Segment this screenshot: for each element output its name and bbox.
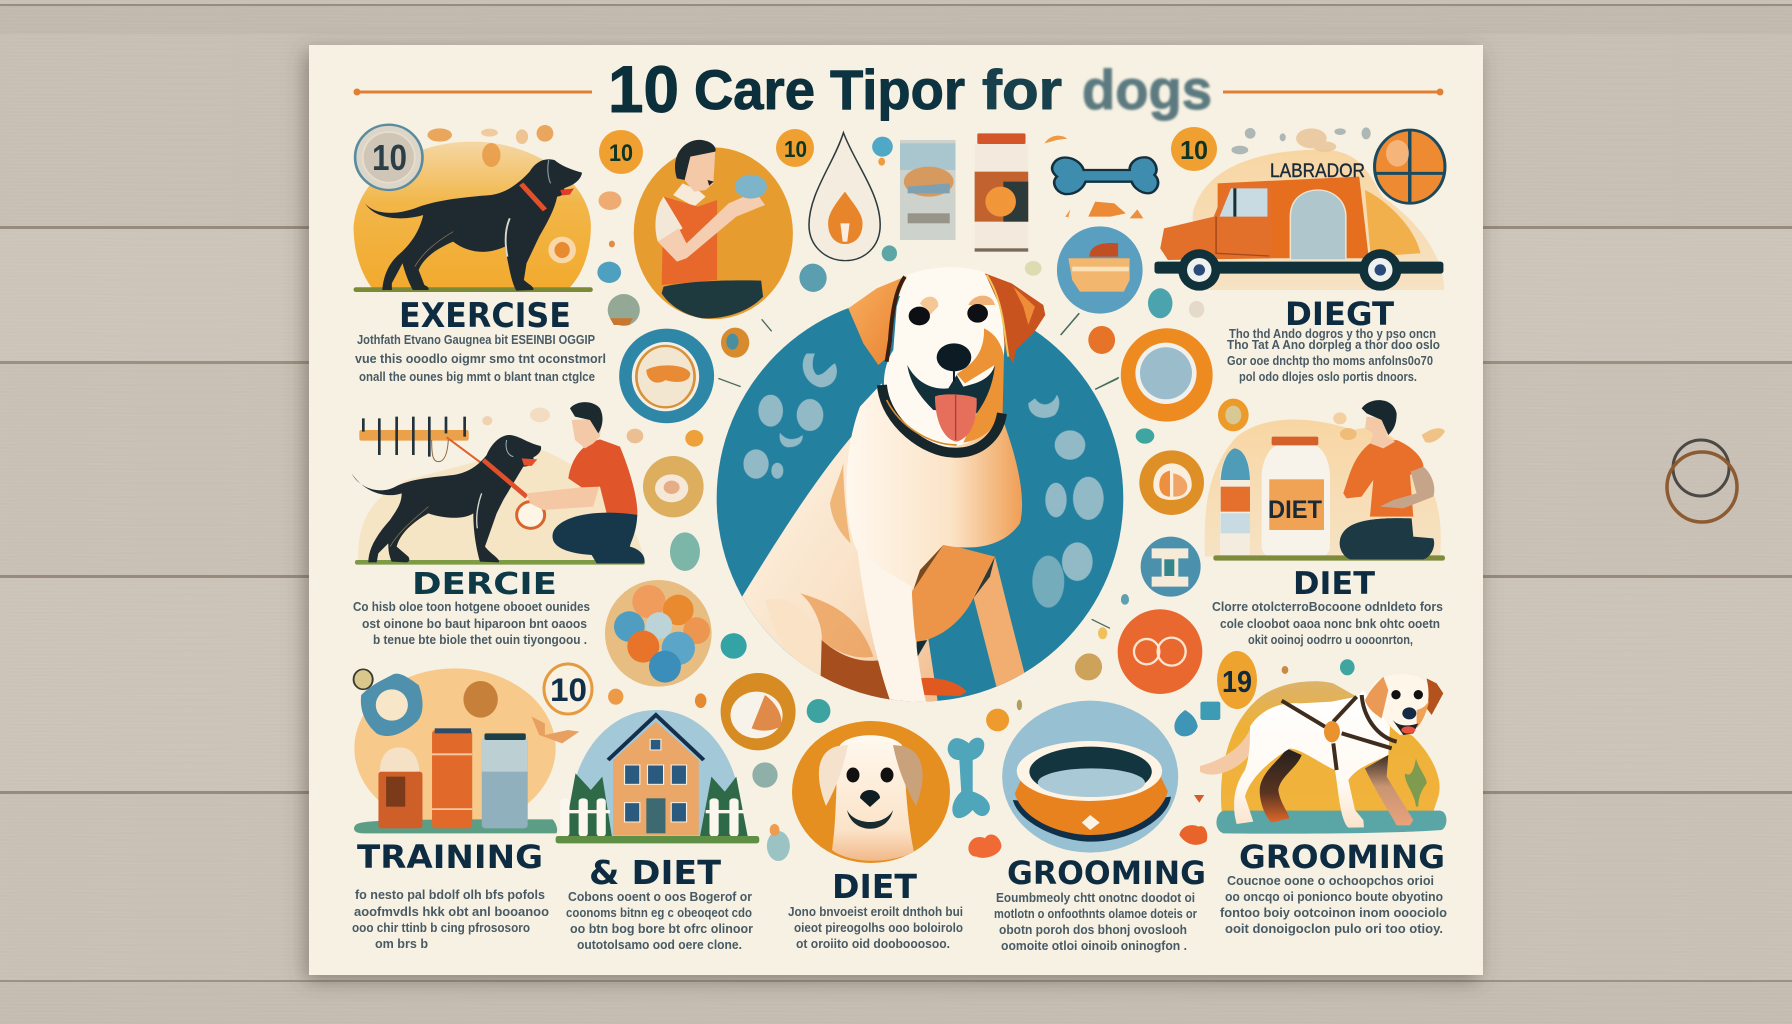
heading: GROOMING: [1007, 854, 1206, 892]
title: for: [982, 58, 1062, 121]
cluster: right middle medallions: [1075, 399, 1355, 694]
body text: Tho Tat A Ano dorpleg a thor doo oslo: [1227, 338, 1440, 352]
illustration: orange bowl and bone: [1002, 701, 1178, 853]
jar label text: DIET: [1268, 496, 1322, 524]
tail: [1200, 725, 1252, 775]
body text: Tho thd Ando dogros y tho y pso oncn: [1229, 327, 1436, 341]
heading: GROOMING: [1239, 838, 1445, 876]
poster sheet: [309, 45, 1483, 975]
connector ticks and scattered dots around main dog: [718, 264, 1129, 680]
body text: fo nesto pal bdolf olh bfs pofols: [355, 888, 545, 902]
panel: training supplies: [352, 664, 706, 951]
eyes: [909, 307, 930, 325]
body text: Cobons ooent o oos Bogerof or: [568, 890, 752, 904]
truck lettering: LABRADOR: [1270, 161, 1365, 182]
body text: Eoumbmeoly chtt onotnc doodot oi: [996, 891, 1195, 905]
harness: [1282, 695, 1397, 770]
illustration: dog in harness: [1200, 674, 1446, 834]
ear right: [985, 273, 1045, 363]
body text: oo oncqo oi ponionco boute obyotino: [1225, 890, 1443, 904]
body text: b tenue bte biole thet ouin tiyongoou .: [373, 633, 587, 647]
dot: orange: [685, 430, 703, 447]
icon: orange ring medallion: [1121, 328, 1213, 422]
body text: ot oroiito oid doobooosoo.: [796, 937, 950, 951]
decorative bits: [1025, 136, 1204, 389]
small decorative dots: [597, 137, 897, 358]
medallion: balls: [605, 580, 712, 687]
heading: DERCIE: [412, 567, 557, 602]
body text: [1220, 874, 1447, 936]
body text: okit ooinoj oodrro u oooonrton,: [1248, 633, 1413, 647]
panel: diet truck: [1154, 127, 1445, 384]
dot: teal: [721, 633, 746, 659]
badge: 10: 10: [784, 136, 807, 162]
far rear leg: [1260, 748, 1302, 823]
body text: Coucnoe oone o ochoopchos orioi: [1227, 874, 1434, 888]
badge: 10: [776, 129, 814, 167]
body text: oo btn bog bore bt ofrc olinoor: [570, 922, 753, 936]
title: 10: [608, 52, 679, 126]
body text: aoofmvdls hkk obt anl booanoo: [354, 905, 549, 919]
body text: oomoite otloi oinoib oninogfon .: [1001, 939, 1187, 953]
illustration: black dog on yellow circle: [354, 125, 593, 292]
body text: [355, 333, 606, 384]
body text: oieot pireogolhs ooo boloirolo: [794, 921, 963, 935]
body text: [566, 890, 753, 952]
body text: Jothfath Etvano Gaugnea bit ESEINBI OGGIP: [357, 333, 595, 347]
icon: blue bubble with box: [1057, 226, 1143, 314]
illustration: orange truck: [1154, 127, 1444, 291]
icon: food bag: [900, 140, 955, 240]
badge: 10: 10: [609, 140, 633, 167]
far front leg: [1365, 755, 1413, 825]
title rule left: [354, 88, 592, 96]
badge: 10: [544, 664, 592, 714]
mouth: [907, 365, 995, 413]
body text: cole cloobot oaoa nonc bnk ohtc ooetn: [1220, 617, 1440, 631]
title: Tipor: [830, 58, 965, 121]
body text: ooo chir ttinb b cing pfrososoro: [352, 921, 530, 935]
icon: water drop: [809, 133, 880, 261]
body text: fontoo boiy ootcoinon inom ooociolo: [1220, 906, 1447, 920]
collar: [882, 385, 1002, 453]
body text: coonoms bitnn eg c obeoqeot cdo: [566, 906, 752, 920]
body text: [994, 891, 1197, 953]
body text: pol odo dlojes oslo portis dnoors.: [1239, 370, 1417, 384]
heading: & DIET: [589, 853, 722, 892]
cluster: top right icons: [900, 127, 1217, 422]
body text: [352, 888, 549, 951]
medallion: treat wedge: [721, 673, 796, 750]
head: [1370, 674, 1431, 735]
illustration: man with cup: [634, 140, 793, 319]
icon: teal ring medallion: [619, 329, 714, 423]
title: Care: [694, 58, 815, 121]
decorative shapes: [968, 653, 1220, 858]
heading: DIET: [832, 867, 917, 906]
body text: Jono bnvoeist eroilt dnthoh bui: [788, 905, 963, 919]
badge: 10: [1171, 127, 1217, 171]
body: [1234, 690, 1390, 828]
cluster: top centre icons: [597, 129, 897, 423]
panel: puppy diet: [788, 721, 963, 951]
blue circle: [717, 295, 1123, 702]
body text: [1227, 327, 1440, 384]
body text: om brs b: [375, 937, 428, 951]
body text: [788, 905, 963, 951]
heading: DIEGT: [1285, 295, 1394, 333]
heading: TRAINING: [357, 838, 543, 876]
tongue: [935, 394, 977, 442]
yellow backdrop: [1221, 681, 1440, 812]
panel: diet jar: [1205, 400, 1445, 647]
dots: [752, 699, 830, 861]
teal ground: [1216, 811, 1446, 834]
heading: EXERCISE: [399, 296, 571, 336]
panel: grooming bowl: [948, 653, 1220, 953]
head: [884, 267, 1005, 447]
panel: home: [556, 710, 759, 952]
body text: Gor ooe dnchtp tho moms anfolns0o70: [1227, 354, 1433, 368]
body text: [353, 600, 590, 647]
badge: 10: 10: [1180, 135, 1208, 165]
body: [740, 383, 1025, 717]
plant: [1405, 758, 1427, 807]
body text: obotn poroh dos bhonj ovoslooh: [999, 923, 1187, 937]
nose: [937, 343, 971, 371]
medallion: red-orange with ring icon: [1118, 609, 1202, 694]
icon: orange globe: [1375, 130, 1445, 203]
ear left: [848, 276, 907, 365]
blob: teal: [670, 532, 700, 571]
medallion: treat: [643, 456, 704, 517]
icon: supplement jar: [975, 133, 1028, 252]
panel: exercise: [354, 125, 606, 384]
body text: motlotn o onfoothnts olamoe doteis or: [994, 907, 1197, 921]
icon: teal bone: [948, 738, 990, 818]
illustration: man with black dog: [352, 402, 645, 565]
badge: 10: [599, 130, 643, 174]
cluster: left middle medallions: [605, 430, 746, 687]
title: dogs: [1082, 58, 1212, 121]
body text: Clorre otolcterroBocoone odnldeto fors: [1212, 600, 1443, 614]
wall ring hook: [1667, 440, 1737, 522]
illustration: canisters and gear toy: [354, 668, 706, 833]
badge: 19: [1217, 651, 1257, 709]
cluster: lower medallions: [721, 673, 830, 861]
panel: grooming harness dog: [1200, 651, 1447, 936]
body text: ost oinone bo baut hiparoon bnt oaoos: [362, 617, 587, 631]
illustration: house and fence: [556, 710, 759, 843]
body text: outotolsamo ood oere clone.: [577, 938, 742, 952]
body text: ooit donoigoclon pulo ori too otioy.: [1225, 922, 1443, 936]
icon: blue bone: [1052, 157, 1158, 194]
title: [608, 52, 1212, 126]
panel: training with leash: [352, 402, 645, 647]
small badge: [1218, 399, 1249, 431]
badge: 10: 10: [550, 672, 587, 708]
title rule right: [1223, 88, 1444, 96]
heading: DIET: [1293, 566, 1375, 602]
dots: [1075, 428, 1355, 680]
badge number: 10: [372, 137, 407, 178]
harness medal: [1324, 721, 1340, 742]
badge: 19: 19: [1222, 664, 1252, 699]
body text: Co hisb oloe toon hotgene obooet ounides: [353, 600, 590, 614]
medallion: orange with white icon: [1139, 450, 1204, 515]
illustration: jar, bottle and man: [1205, 400, 1445, 561]
body text: [1212, 600, 1443, 647]
medallion: teal with bone icon: [1141, 537, 1201, 597]
main dog illustration: [717, 267, 1123, 717]
body text: onall the ounes big mmt o blant tnan ctglce: [359, 370, 595, 384]
body text: vue this ooodlo oigmr smo tnt oconstmorl: [355, 352, 606, 366]
illustration: puppy in orange circle: [792, 721, 950, 863]
pale paw marks: [743, 353, 1104, 608]
